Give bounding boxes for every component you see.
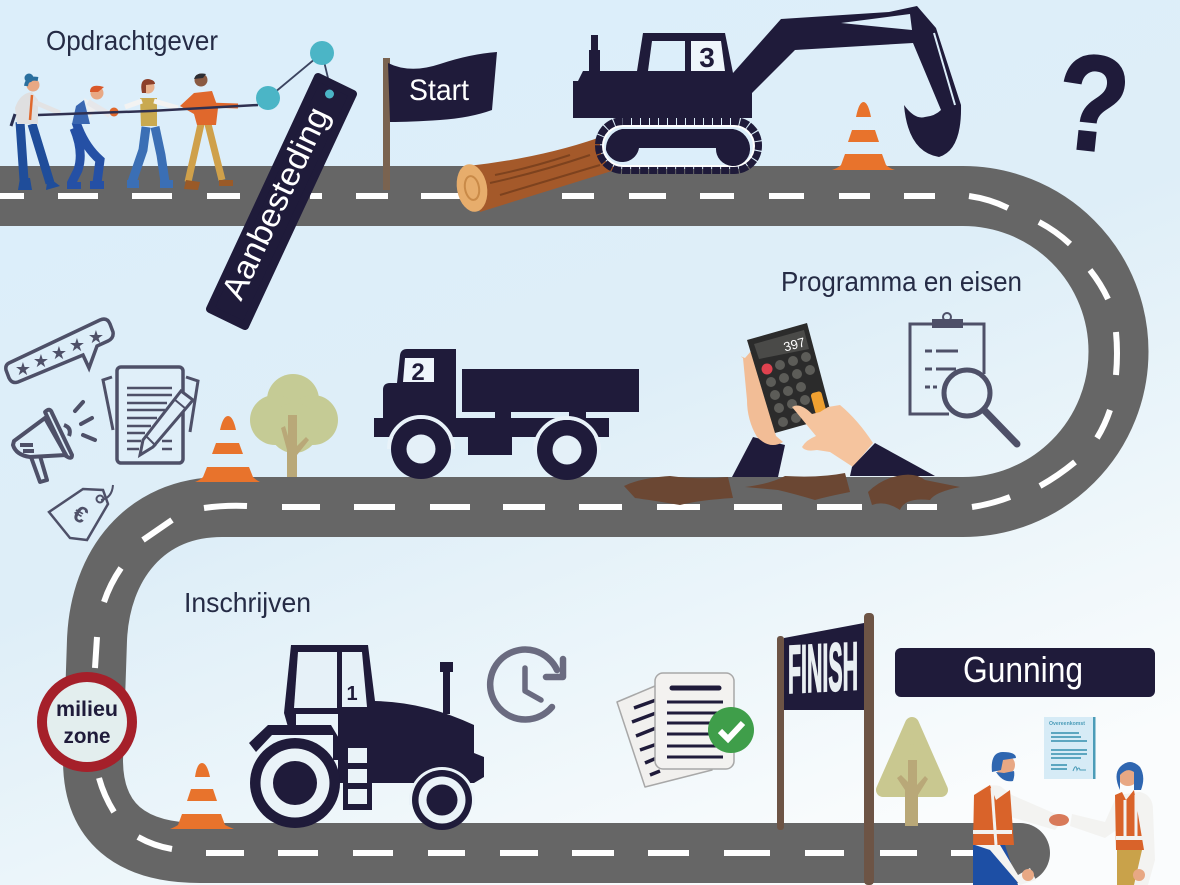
tractor xyxy=(249,645,484,830)
log xyxy=(453,138,615,214)
excavator: 3 xyxy=(699,42,715,73)
icon: megaphone xyxy=(13,402,95,482)
icon: price tag: € xyxy=(68,500,93,529)
person 1 xyxy=(11,74,60,190)
sign: Aanbesteding with pins xyxy=(210,41,353,326)
person 2 xyxy=(67,86,118,189)
icon: rating bubble: ★ xyxy=(51,343,67,363)
tree triangle xyxy=(883,724,941,826)
finish flag xyxy=(777,613,874,885)
person 3 xyxy=(125,79,178,188)
people pulling rope xyxy=(11,74,258,190)
icon: price tag xyxy=(49,485,113,540)
excavator xyxy=(573,6,961,169)
handshake people xyxy=(973,752,1155,885)
rope xyxy=(38,105,258,115)
icon: document with pencil xyxy=(103,367,198,463)
contract document xyxy=(1044,717,1096,779)
icon: rating bubble: ★ xyxy=(69,335,85,355)
icon: rating bubble: ★ xyxy=(33,351,49,371)
calculator with hands xyxy=(732,323,935,477)
truck xyxy=(374,349,639,480)
sign: Aanbesteding with pins: Aanbesteding xyxy=(214,101,336,305)
flag: Start: Start xyxy=(409,74,470,107)
tracks xyxy=(600,122,757,169)
icon: documents with check xyxy=(617,673,754,787)
traffic cone top xyxy=(832,102,895,170)
infographic: tender road scene: FINISH xyxy=(788,628,858,708)
icon: clipboard and magnifier xyxy=(910,313,1017,444)
milieu zone sign xyxy=(37,672,137,772)
question mark: ? xyxy=(1049,24,1136,183)
contract document: Overeenkomst xyxy=(1049,721,1085,727)
icon: clock with arrow xyxy=(490,650,563,720)
milieu zone sign: zone xyxy=(64,725,110,748)
icon: rating bubble: ★ xyxy=(15,359,31,379)
heading: Opdrachtgever: Opdrachtgever xyxy=(46,25,218,56)
truck: 2 xyxy=(411,359,425,386)
tree round xyxy=(250,374,338,477)
person 4 xyxy=(180,74,238,190)
tractor: 1 xyxy=(346,683,358,705)
calculator with hands: 397 xyxy=(782,334,807,355)
man xyxy=(973,752,1065,885)
traffic cone bottom xyxy=(170,763,234,829)
label: Gunning: Gunning xyxy=(963,649,1083,690)
heading: Inschrijven: Inschrijven xyxy=(184,587,311,618)
mud puddles xyxy=(624,473,960,510)
traffic cone middle xyxy=(195,416,260,482)
road xyxy=(0,196,1118,883)
woman xyxy=(1022,762,1155,885)
heading: Programma en eisen: Programma en eisen xyxy=(781,266,1022,297)
icon: rating bubble: ★ xyxy=(88,327,104,347)
icon: rating bubble xyxy=(6,319,113,382)
flag: Start xyxy=(383,52,497,190)
milieu zone sign: milieu xyxy=(56,698,118,721)
calculator buttons xyxy=(762,352,827,427)
label: Gunning xyxy=(895,648,1155,697)
